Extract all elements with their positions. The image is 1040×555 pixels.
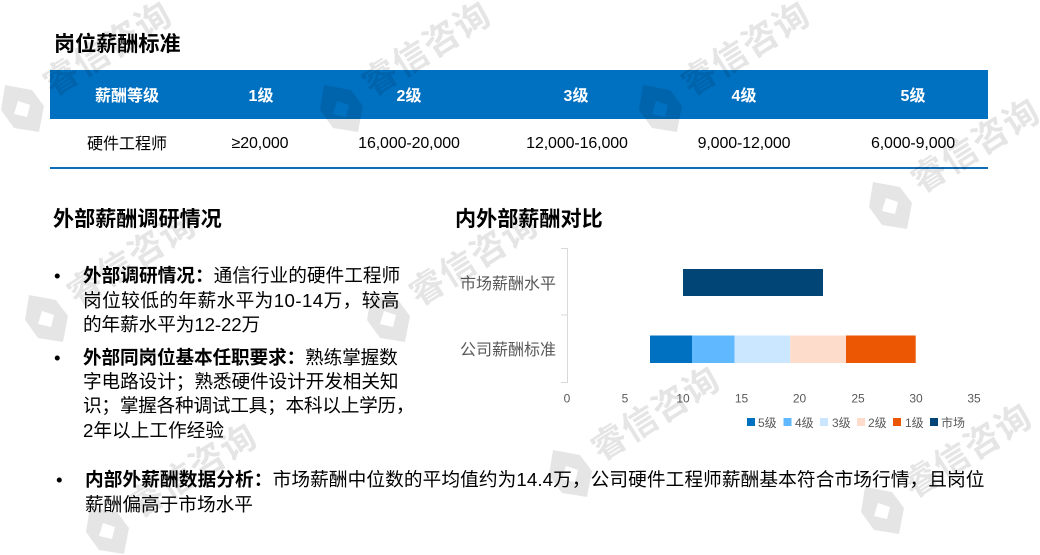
line 3: 的年薪水平为12-22万 [83, 314, 260, 335]
heading: 岗位薪酬标准: 岗位薪酬标准 [54, 33, 181, 56]
text block: job requirements [54, 347, 414, 441]
header: 3级: 3级 [564, 88, 588, 105]
header: 4级: 4级 [732, 88, 756, 105]
legend: 市场 [941, 415, 965, 430]
text block: internal vs external analysis [56, 469, 984, 515]
watermarks: 睿信咨询 [402, 204, 545, 314]
bar: market [683, 269, 823, 296]
value: level 4: 9,000-12,000 [698, 135, 790, 152]
bar chart: internal vs external salary [460, 248, 981, 430]
value: level 1: ≥20,000 [232, 135, 288, 152]
line 1: 内部外薪酬数据分析：市场薪酬中位数的平均值约为14.4万，公司硬件工程师薪酬基本符合市场行情，且岗位 [85, 469, 984, 490]
bullet: • [54, 347, 61, 368]
value axis labels: 20 [793, 392, 806, 406]
watermarks: 睿信咨询 [121, 416, 264, 526]
table header row [50, 70, 988, 118]
heading: 外部薪酬调研情况: 外部薪酬调研情况 [53, 208, 222, 231]
watermarks: 睿信咨询 [60, 204, 203, 314]
text block: external survey [54, 265, 400, 335]
value axis labels: 35 [967, 392, 981, 406]
line 3: 识；掌握各种调试工具；本科以上学历， [83, 395, 414, 416]
value axis labels: 0 [564, 392, 571, 406]
legend: 2级 [868, 416, 887, 430]
legend: 4级 [795, 416, 814, 430]
bullet: • [56, 469, 63, 490]
panel: salary table [50, 70, 988, 169]
legend: 3级 [832, 416, 851, 430]
value: level 3: 12,000-16,000 [526, 135, 628, 152]
watermarks: 睿信咨询 [896, 396, 1039, 506]
header: 薪酬等级: 薪酬等级 [95, 88, 159, 105]
category label: 公司薪酬标准: 公司薪酬标准 [460, 341, 556, 359]
line 1: 外部同岗位基本任职要求：熟练掌握数 [83, 347, 398, 368]
line 2: 薪酬偏高于市场水平 [85, 494, 253, 515]
value axis labels: 5 [622, 392, 629, 406]
value axis labels: 25 [851, 392, 865, 406]
bar: company salary stack [650, 336, 916, 363]
table bottom rule [50, 167, 988, 169]
category axis [561, 248, 568, 382]
value: level 2: 16,000-20,000 [358, 135, 460, 152]
value axis labels: 15 [735, 392, 748, 406]
value axis labels: 30 [909, 392, 923, 406]
legend: 1级 [905, 416, 924, 430]
category label: 市场薪酬水平: 市场薪酬水平 [460, 275, 556, 293]
header: 2级: 2级 [397, 88, 421, 105]
bullet: • [54, 265, 61, 286]
legend: 5级 [758, 416, 777, 430]
header: 5级: 5级 [901, 88, 925, 105]
watermarks: 睿信咨询 [584, 359, 727, 469]
value axis labels: 10 [676, 392, 690, 406]
row label: 硬件工程师: 硬件工程师 [87, 136, 167, 153]
header: 1级: 1级 [249, 88, 273, 105]
line 2: 字电路设计；熟悉硬件设计开发相关知 [83, 371, 398, 392]
value axis labels [564, 392, 981, 406]
heading: 内外部薪酬对比: 内外部薪酬对比 [455, 208, 603, 231]
legend [747, 415, 965, 430]
value: level 5: 6,000-9,000 [871, 135, 955, 152]
line 1: 外部调研情况：通信行业的硬件工程师 [83, 265, 400, 286]
line 2: 岗位较低的年薪水平为10-14万，较高 [83, 290, 400, 311]
line 4: 2年以上工作经验 [83, 420, 224, 441]
